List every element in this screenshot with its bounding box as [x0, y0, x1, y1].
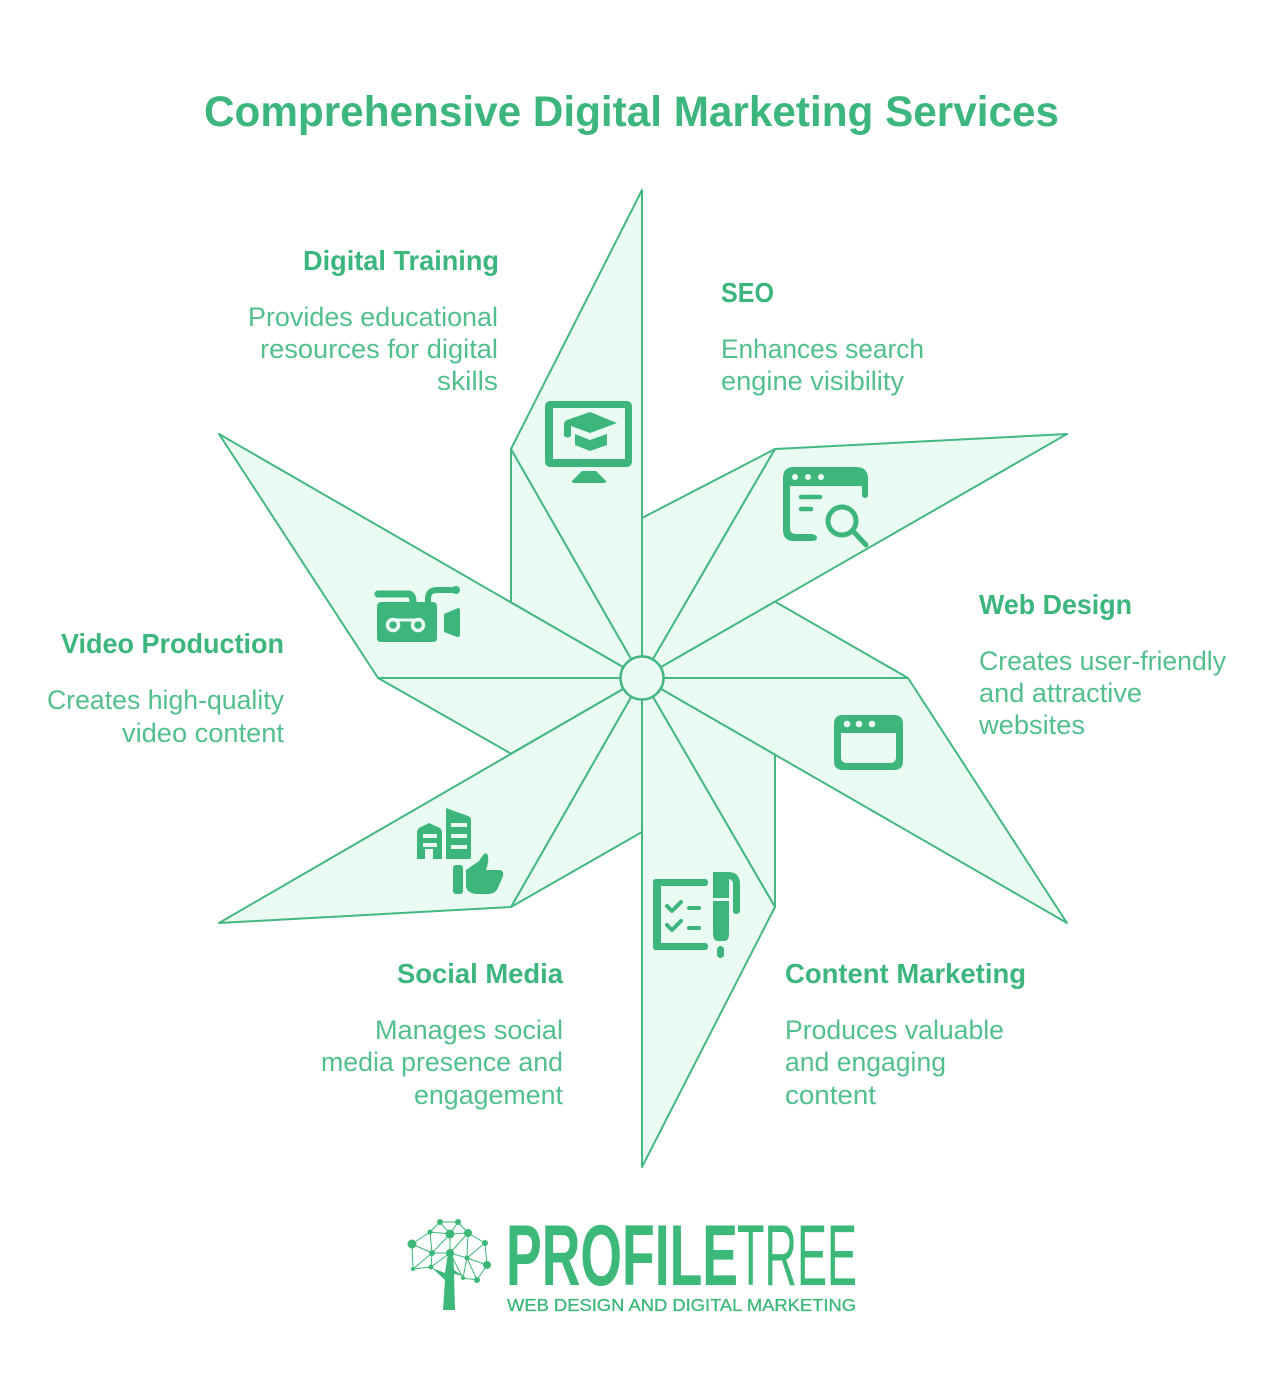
- label: Video Production: [47, 628, 284, 748]
- blade: SEO: [642, 434, 1067, 678]
- blade: Digital Training: [511, 190, 642, 678]
- label: Video Production: Video Production: [61, 628, 284, 659]
- label: SEO: engine visibility: [721, 366, 905, 396]
- logo tree icon: [408, 1219, 491, 1310]
- label: Video Production: Creates high-quality: [47, 685, 284, 715]
- label: Content Marketing: content: [785, 1080, 877, 1110]
- label: Digital Training: [248, 245, 499, 396]
- icon: checklist and pen: [653, 872, 740, 958]
- logo tagline: WEB DESIGN AND DIGITAL MARKETING: [507, 1295, 856, 1315]
- label: Content Marketing: [785, 958, 1026, 1110]
- label: Digital Training: resources for digital: [260, 334, 498, 364]
- title: Comprehensive Digital Marketing Services: [204, 89, 1059, 136]
- label: Social Media: media presence and: [321, 1047, 563, 1077]
- label: SEO: Enhances search: [721, 334, 924, 364]
- icon: browser with magnifier: [783, 467, 868, 545]
- label: Web Design: Web Design: [979, 589, 1132, 620]
- label: Web Design: [978, 589, 1226, 740]
- icon: graduation cap on monitor: [545, 401, 632, 483]
- label: Social Media: Manages social: [375, 1015, 563, 1045]
- label: Social Media: [321, 958, 563, 1110]
- label: Web Design: and attractive: [979, 678, 1142, 708]
- logo: ProfileTree: [408, 1208, 857, 1315]
- label: Content Marketing: Content Marketing: [785, 958, 1026, 989]
- pinwheel diagram: [219, 190, 1067, 1167]
- blade: Video Production: [219, 434, 642, 754]
- icon: browser window: [834, 715, 903, 770]
- label: Digital Training: Digital Training: [303, 245, 499, 276]
- label: Social Media: engagement: [414, 1080, 563, 1110]
- label: SEO: SEO: [721, 277, 774, 308]
- icon: video camera: [377, 586, 460, 642]
- label: Content Marketing: and engaging: [785, 1047, 946, 1077]
- label: Digital Training: Provides educational: [248, 302, 498, 332]
- label: Video Production: video content: [122, 718, 284, 748]
- blade: Social Media: [219, 678, 642, 923]
- icon: buildings and thumbs up: [417, 808, 503, 894]
- label: Digital Training: skills: [437, 366, 498, 396]
- label: Web Design: websites: [978, 710, 1085, 740]
- logo: ProfileTree: TREE: [737, 1208, 857, 1304]
- blade: Web Design: [642, 602, 1067, 923]
- center hub: [620, 656, 664, 700]
- logo wordmark: PROFILE: [506, 1208, 738, 1304]
- label: SEO: [721, 277, 924, 396]
- label: Web Design: Creates user-friendly: [979, 646, 1226, 676]
- label: Social Media: Social Media: [397, 958, 563, 989]
- blade: Content Marketing: [642, 678, 775, 1167]
- label: Content Marketing: Produces valuable: [785, 1015, 1004, 1045]
